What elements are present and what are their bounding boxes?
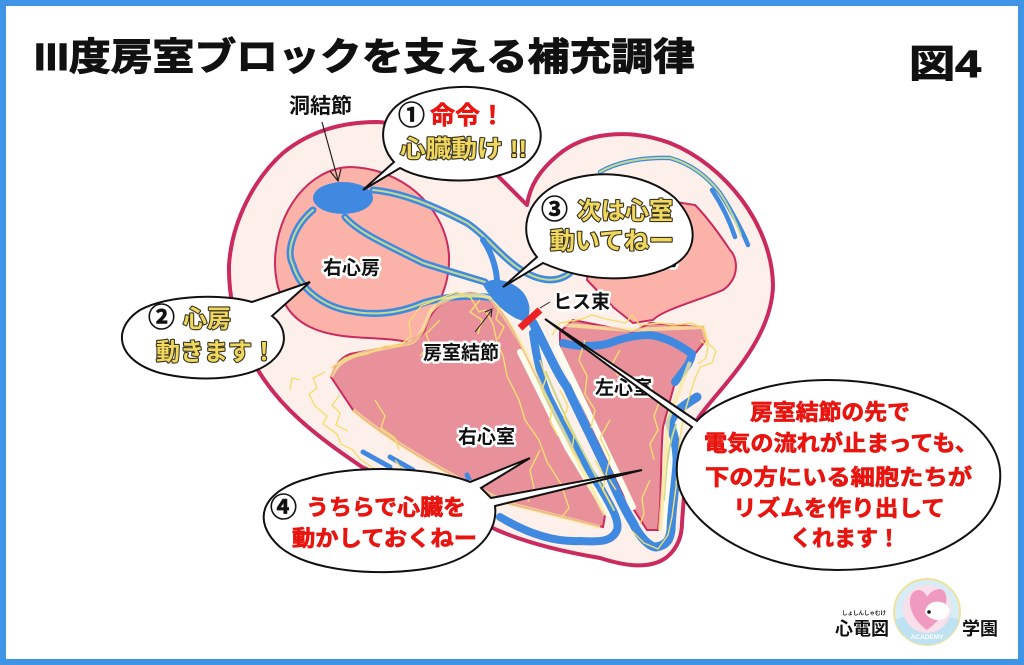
- arrow: to AV node: [475, 309, 492, 332]
- label: left atrium (partly hidden): 房: [660, 249, 679, 270]
- label: sinus node: [289, 95, 352, 181]
- septum white strips: [520, 347, 682, 530]
- explanation text: 房室結節の先で: [750, 400, 910, 425]
- callout 3: ventricle: 動いてねー: [550, 228, 674, 255]
- explanation text: リズムを作り出して: [733, 496, 945, 521]
- ventricular electrical fibers: [290, 292, 716, 549]
- sinus node: [313, 182, 373, 214]
- label: bundle of His: [520, 291, 610, 328]
- callout 4: escape rhythm: 動かしておくねー: [292, 526, 477, 551]
- callout 2: atria: [122, 282, 310, 378]
- His bundle block mark: [520, 310, 540, 328]
- explanation text: くれます！: [790, 526, 900, 551]
- callout 2: atria: ②: [148, 303, 175, 333]
- callout: explanation: [545, 319, 1000, 570]
- explanation text: 下の方にいる細胞たちが: [705, 465, 972, 490]
- conduction pathways: [290, 158, 748, 547]
- left ventricle: [560, 320, 706, 530]
- callout 1: command: 心臓動け !!: [400, 136, 527, 163]
- label: left ventricle: 左心室: [595, 377, 652, 399]
- label: AV node: 房室結節: [423, 342, 499, 364]
- figure number: 図4: [909, 44, 981, 86]
- callout 3: ventricle: [503, 174, 693, 287]
- logo: しょしんしゃむけ: [842, 610, 887, 617]
- heart outline: [229, 122, 773, 565]
- callout 1: command: [363, 87, 541, 190]
- label: sinus node: 洞結節: [289, 95, 352, 118]
- explanation text: 電気の流れが止まっても、: [704, 431, 978, 456]
- left atrium: [587, 190, 736, 323]
- callout 1: command: 命令！: [430, 102, 505, 130]
- logo: [835, 579, 998, 645]
- logo: 心電図: [835, 619, 889, 639]
- heart diagram: [229, 122, 773, 565]
- septal band 1: [500, 333, 618, 541]
- logo badge: [894, 579, 960, 645]
- callout 1: command: ①: [398, 101, 425, 131]
- atrioventricular node: [483, 280, 530, 322]
- label: bundle of His: ヒス束: [553, 291, 610, 313]
- callout 4: escape rhythm: [264, 458, 642, 572]
- callout 3: ventricle: ③: [541, 195, 568, 225]
- logo: 学園: [962, 618, 998, 639]
- arrow: to sinus node: [322, 122, 341, 181]
- right ventricle: [331, 293, 605, 527]
- septal band 2: [533, 323, 697, 547]
- label: AV node: [423, 309, 499, 364]
- callout 2: atria: 心房: [183, 306, 231, 333]
- callout 2: atria: 動きます！: [156, 339, 276, 366]
- right atrium: [275, 167, 449, 343]
- title: III度房室ブロックを支える補充調律: [34, 36, 695, 79]
- label: right atrium: 右心房: [323, 257, 380, 279]
- logo badge: ACADEMY: [911, 634, 944, 641]
- explanation text: [704, 400, 978, 551]
- callout 4: escape rhythm: ④: [270, 493, 297, 523]
- callout 3: ventricle: 次は心室: [577, 198, 673, 225]
- label: right ventricle: 右心室: [458, 426, 515, 448]
- left ventricle top band: [563, 335, 692, 382]
- callout 4: escape rhythm: うちらで心臓を: [306, 495, 466, 520]
